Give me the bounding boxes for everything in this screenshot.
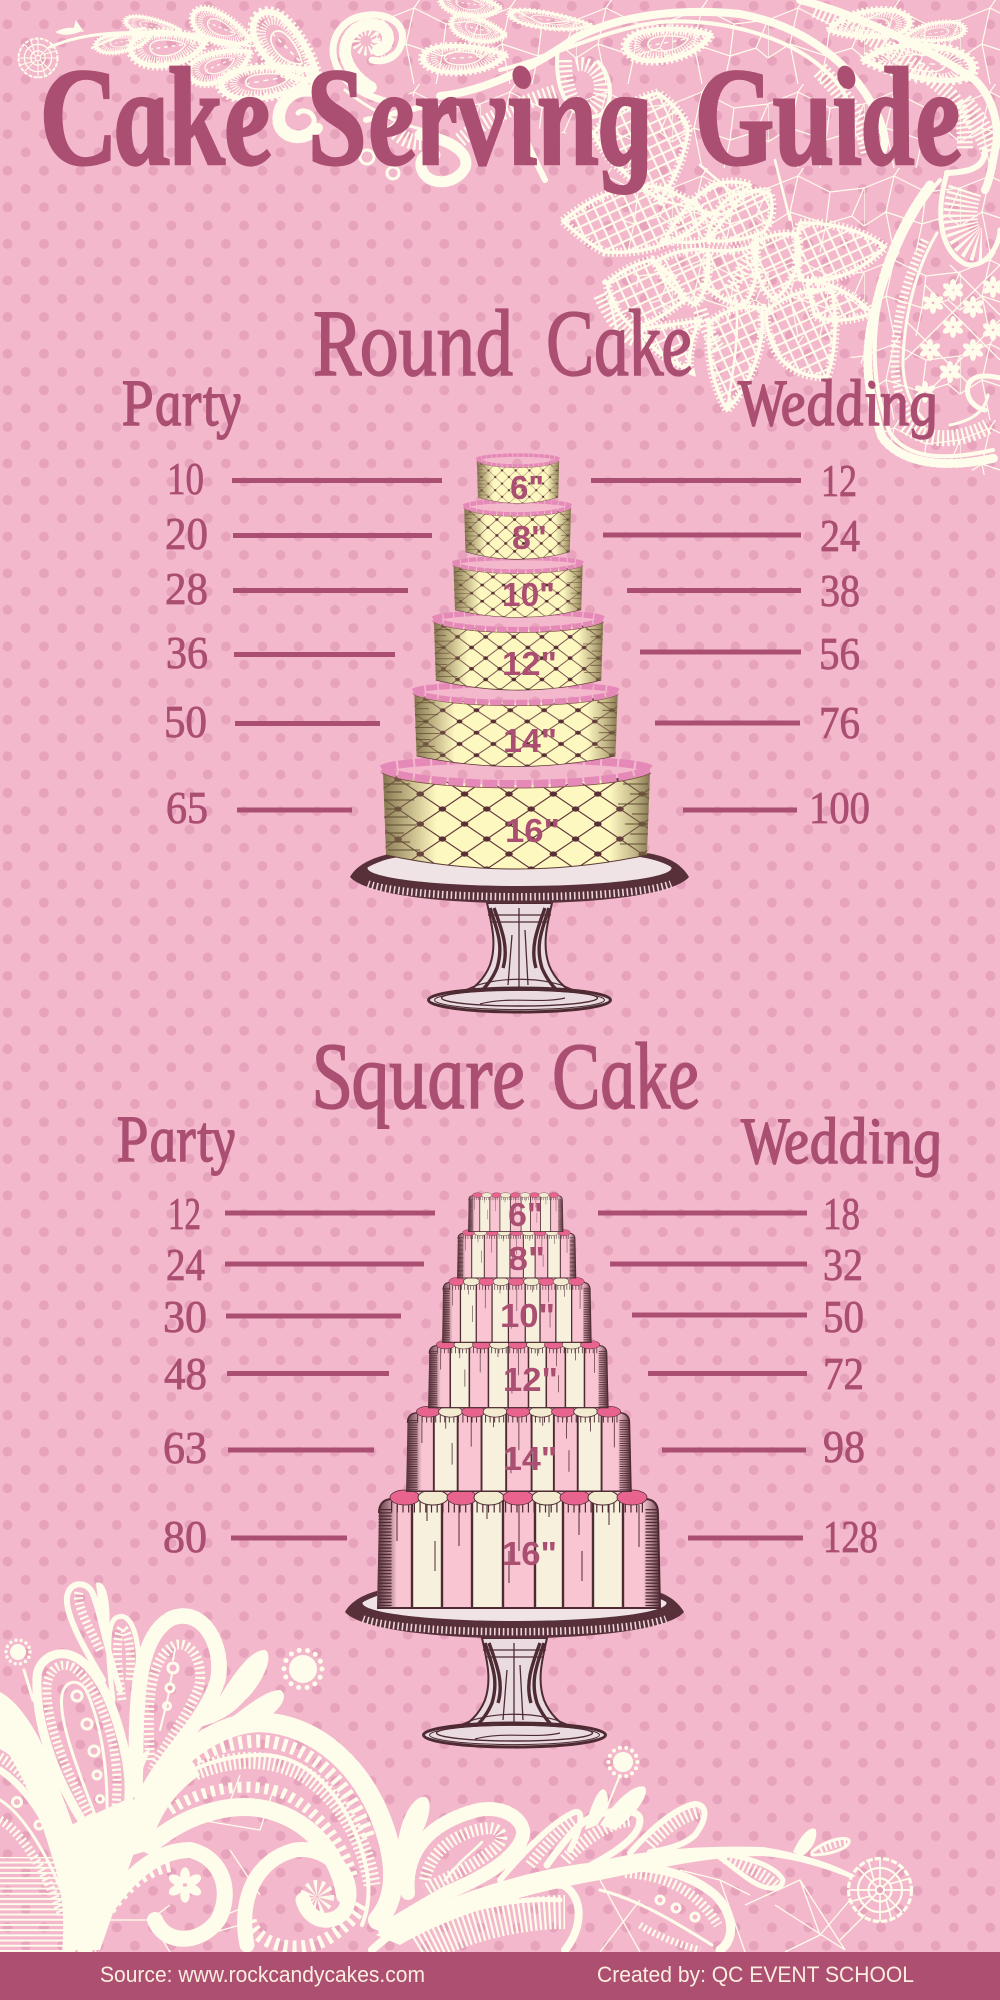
size labels (square): 14" — [503, 1440, 557, 1477]
heading: round cake: Cake — [537, 290, 699, 396]
square cake servings rows — [163, 1188, 878, 1562]
size labels (round) — [502, 469, 560, 849]
lace: top corner — [18, 0, 1000, 480]
tier 6 inch (round) — [477, 455, 559, 503]
heading: square cake — [304, 1023, 706, 1129]
row: round 14 inch — [164, 696, 860, 748]
round cake illustration — [350, 455, 689, 1012]
size labels (round): 6" — [510, 469, 544, 506]
lace: lower gear paisley — [383, 1809, 523, 1930]
size labels (square): 10" — [500, 1297, 555, 1334]
tier 14 inch (square) — [406, 1406, 631, 1491]
lace: beaded feather — [37, 1654, 129, 1837]
row: square 16 inch: 80 — [163, 1511, 207, 1562]
lace: sweeping arcs — [115, 1722, 393, 1925]
row: square 6 inch — [168, 1188, 860, 1239]
tier 10 inch (round) — [453, 558, 583, 617]
lace: top centre plume — [423, 0, 885, 180]
column label: wedding (round): Wedding — [732, 367, 942, 440]
title: Cake — [30, 41, 281, 195]
size labels (square): 16" — [502, 1535, 557, 1572]
size labels (square): 6" — [508, 1196, 543, 1233]
cake stand (round) — [350, 850, 689, 1012]
row: round 16 inch: 100 — [809, 782, 870, 833]
tier 12 inch (round) — [433, 612, 604, 690]
lace: gear paisley — [135, 1616, 219, 1790]
lace: horizontal stripes — [0, 1857, 68, 1952]
row: round 8 inch: 20 — [165, 508, 208, 559]
lace: bottom right — [372, 1748, 912, 1952]
row: round 14 inch: 76 — [819, 697, 860, 748]
column label: wedding (square): Wedding — [735, 1105, 946, 1178]
row: round 12 inch: 56 — [819, 628, 860, 679]
heading: round cake: Round — [303, 290, 520, 396]
row: square 16 inch — [163, 1511, 878, 1562]
column label: party (round): Party — [115, 367, 247, 440]
row: round 6 inch: 12 — [821, 455, 857, 506]
size labels (square): 8" — [508, 1240, 545, 1277]
row: round 16 inch — [166, 782, 870, 833]
row: round 6 inch: 10 — [167, 453, 204, 504]
title — [30, 41, 971, 195]
row: square 10 inch: 50 — [823, 1291, 864, 1342]
lace: flower — [563, 93, 885, 410]
footer bar — [0, 1952, 1000, 2000]
tier 12 inch (square) — [428, 1340, 608, 1408]
lace: tall feather — [67, 1582, 138, 1700]
lace: spirals and flower — [85, 1775, 362, 1952]
cake stand (square) — [345, 1585, 684, 1747]
row: square 16 inch: 128 — [823, 1511, 878, 1562]
row: round 8 inch — [165, 508, 860, 561]
size labels (round): 8" — [512, 519, 547, 556]
tier 8 inch (round) — [464, 501, 571, 559]
heading: square cake: Cake — [543, 1023, 706, 1129]
row: round 10 inch: 38 — [820, 565, 860, 616]
row: square 8 inch — [166, 1239, 863, 1290]
square cake illustration — [345, 1193, 684, 1747]
row: square 10 inch: 30 — [163, 1291, 207, 1342]
tier 16 inch (square) — [377, 1490, 660, 1608]
lace: hatched bean — [372, 1884, 579, 1950]
tier 8 inch (square) — [457, 1230, 576, 1278]
row: square 12 inch: 48 — [164, 1348, 207, 1399]
row: square 6 inch: 18 — [823, 1188, 860, 1239]
tier 6 inch (square) — [468, 1193, 563, 1232]
row: round 16 inch: 65 — [166, 782, 208, 833]
size labels (square) — [500, 1196, 558, 1572]
row: round 8 inch: 24 — [820, 510, 860, 561]
lace: big paisley and leaves — [577, 1828, 849, 1950]
creator credit: Created by: QC EVENT SCHOOL — [597, 1962, 914, 1987]
row: round 12 inch: 36 — [166, 627, 208, 678]
row: square 10 inch — [163, 1291, 864, 1342]
column label: party (square): Party — [110, 1103, 241, 1176]
row: square 12 inch — [164, 1348, 864, 1399]
row: square 8 inch: 32 — [823, 1239, 863, 1290]
size labels (round): 10" — [502, 576, 555, 613]
lace: left feather masses — [0, 1640, 150, 1952]
source credit: Source: www.rockcandycakes.com — [100, 1962, 425, 1987]
round cake servings rows — [164, 453, 870, 833]
lace: top-left plume — [18, 4, 330, 103]
lace: top spirals — [277, 15, 466, 182]
row: square 14 inch: 63 — [163, 1422, 207, 1473]
tier 10 inch (square) — [442, 1277, 591, 1342]
row: square 14 inch: 98 — [823, 1421, 865, 1472]
size labels (round): 16" — [505, 812, 560, 849]
row: round 12 inch — [166, 627, 860, 679]
row: round 14 inch: 50 — [164, 696, 207, 747]
heading: square cake: Square — [304, 1023, 532, 1129]
row: round 10 inch: 28 — [165, 563, 208, 614]
row: square 12 inch: 72 — [823, 1348, 864, 1399]
size labels (round): 14" — [503, 722, 557, 759]
row: square 14 inch — [163, 1421, 865, 1473]
row: round 10 inch — [165, 563, 860, 616]
size labels (square): 12" — [503, 1361, 558, 1398]
lace: petal tips and flowers — [200, 1650, 430, 1885]
row: round 6 inch — [167, 453, 857, 506]
row: square 6 inch: 12 — [168, 1188, 201, 1239]
lace: bottom left — [0, 1582, 430, 1952]
heading: round cake — [303, 290, 699, 396]
tier 14 inch (round) — [414, 684, 619, 766]
tier 16 inch (round) — [382, 759, 651, 869]
title: Serving — [295, 41, 662, 195]
lace: stem and petals — [376, 1748, 856, 1945]
lace: right plumes — [800, 0, 1000, 463]
size labels (round): 12" — [502, 645, 557, 682]
row: square 8 inch: 24 — [166, 1239, 205, 1290]
